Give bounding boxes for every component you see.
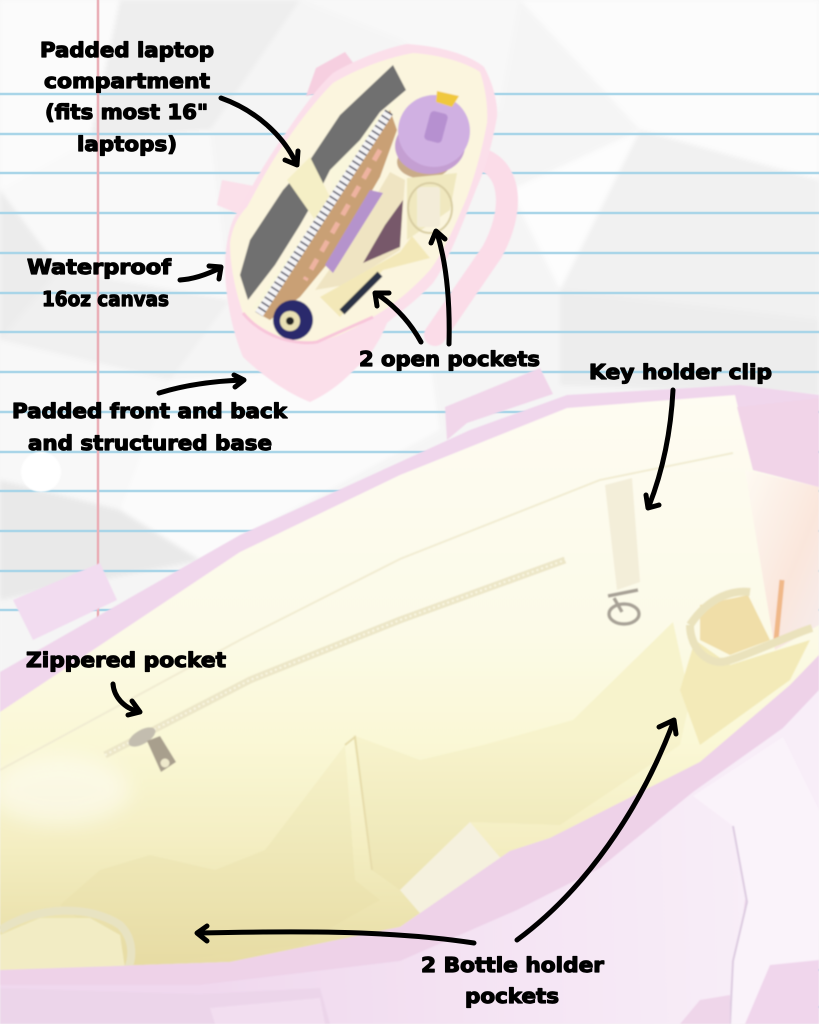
divider fold line xyxy=(345,737,372,870)
label: laptop compartment: (fits most 16" xyxy=(45,100,208,124)
water bottle xyxy=(395,91,470,179)
hem seam xyxy=(0,453,733,770)
arrow: bottle holder right xyxy=(517,720,676,940)
right handle xyxy=(435,160,507,335)
charger pocket xyxy=(407,173,457,240)
padded sleeve edge xyxy=(252,92,408,312)
label: bottle holder pockets: 2 Bottle holder xyxy=(421,953,604,977)
velcro tab xyxy=(400,822,515,925)
small photo: organised tote bag xyxy=(217,44,507,402)
strap fold shadow xyxy=(730,826,747,1024)
notebook xyxy=(257,110,397,320)
label: zippered pocket: Zippered pocket xyxy=(26,648,226,672)
front pink rim xyxy=(243,313,373,343)
large photo: tote bag interior xyxy=(0,368,819,1024)
charger xyxy=(417,187,440,227)
arrow: padded base xyxy=(159,375,244,393)
label: bottle holder pockets: pockets xyxy=(465,984,559,1008)
key clip xyxy=(608,590,639,624)
bag body xyxy=(225,44,497,402)
deep compartment xyxy=(60,745,380,965)
left handle xyxy=(217,180,254,218)
label: padded front and back: Padded front and back xyxy=(12,399,288,423)
round charm xyxy=(273,300,313,340)
arrow: laptop compartment xyxy=(221,98,298,165)
label: waterproof canvas: Waterproof xyxy=(27,255,171,279)
label: laptop compartment xyxy=(40,38,214,156)
label: key holder clip: Key holder clip xyxy=(589,360,772,384)
right strap top xyxy=(737,398,819,487)
front panel xyxy=(0,690,819,1024)
label: waterproof canvas xyxy=(27,255,171,311)
bag lining xyxy=(230,53,487,342)
cord xyxy=(408,183,452,233)
label: laptop compartment: laptops) xyxy=(77,132,177,156)
front binding xyxy=(0,988,330,1024)
open pocket xyxy=(320,236,430,317)
arrow: bottle holder left xyxy=(197,926,474,943)
left handle xyxy=(13,563,117,640)
key holder strap xyxy=(605,478,640,590)
book stack xyxy=(315,172,405,290)
label: bottle holder pockets xyxy=(421,953,604,1008)
back handle xyxy=(306,52,354,96)
label: waterproof canvas: 16oz canvas xyxy=(42,287,169,311)
laptop sleeve xyxy=(240,65,406,300)
phone in pocket xyxy=(342,274,380,312)
left bottle holder xyxy=(0,911,131,972)
arrow: key holder clip xyxy=(646,390,673,508)
zipper seam xyxy=(105,560,565,755)
lower lining lip xyxy=(0,838,550,972)
pale highlight on lining xyxy=(0,755,130,825)
laptop strap xyxy=(287,157,330,220)
right strap xyxy=(693,737,819,1024)
zipper pull xyxy=(126,723,176,772)
near handle base xyxy=(210,998,325,1024)
arrow: open pocket left xyxy=(375,293,421,342)
right divider panel xyxy=(353,622,690,890)
lower corner strap xyxy=(680,995,730,1024)
label: open pockets: 2 open pockets xyxy=(359,347,540,371)
punched hole xyxy=(21,452,61,492)
bag shell xyxy=(0,385,819,1024)
front rim xyxy=(0,655,819,985)
lining back wall xyxy=(0,395,819,970)
right bottle holder xyxy=(680,592,812,745)
label: padded front and back: and structured base xyxy=(28,431,272,455)
label: laptop compartment: Padded laptop xyxy=(40,38,214,62)
arrow: waterproof canvas xyxy=(180,266,221,280)
orange glow xyxy=(776,580,782,640)
notebook margin line xyxy=(97,0,99,620)
top handle xyxy=(445,368,553,440)
arrow: open pocket right xyxy=(431,231,449,344)
arrow: zippered pocket xyxy=(113,684,140,715)
label: laptop compartment: compartment xyxy=(44,69,210,93)
label: padded front and back xyxy=(12,399,288,455)
right peach gap xyxy=(745,470,819,650)
